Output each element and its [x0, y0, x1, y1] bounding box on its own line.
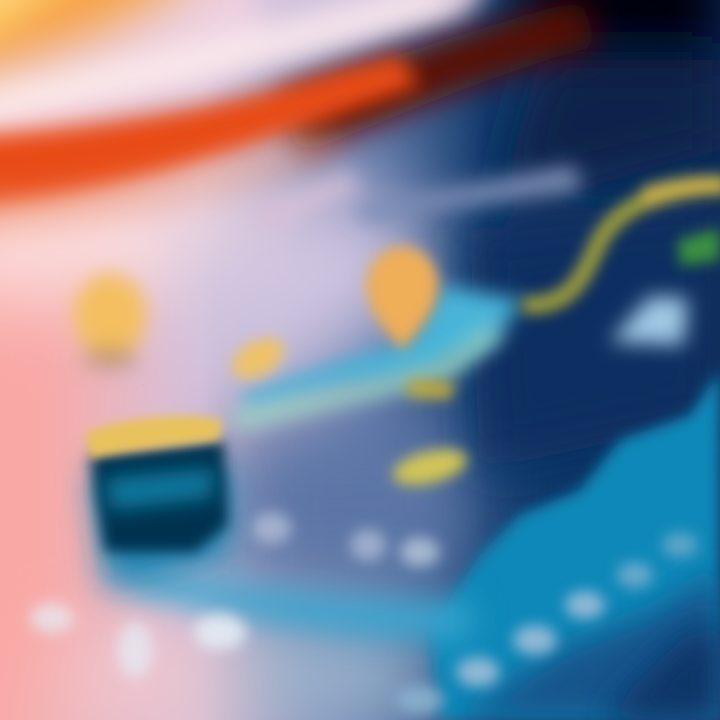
- icon: orange map pin: [366, 246, 439, 350]
- panel: orange and white sweeping band: [0, 0, 600, 235]
- icon: yellow coin upper left: [74, 273, 146, 370]
- icon: pale triangle marker: [610, 296, 688, 345]
- icon: green arrow marker: [678, 228, 720, 266]
- icon: yellow tag lower: [389, 442, 471, 492]
- panel: pink left haze: [0, 190, 470, 720]
- icon: small yellow tag: [225, 329, 291, 387]
- chart: pale dots on lower left: [30, 512, 440, 678]
- panel: pale streak text line top: [250, 165, 582, 235]
- icon: database cylinder: [86, 416, 232, 590]
- chart: yellow-green trend line: [415, 185, 720, 390]
- chart: cyan trend ribbon: [230, 285, 525, 430]
- chart: data dots on the mountain: [396, 532, 698, 714]
- panel: dark top right sky: [470, 0, 720, 470]
- chart: blue mountain area at bottom right: [130, 370, 720, 720]
